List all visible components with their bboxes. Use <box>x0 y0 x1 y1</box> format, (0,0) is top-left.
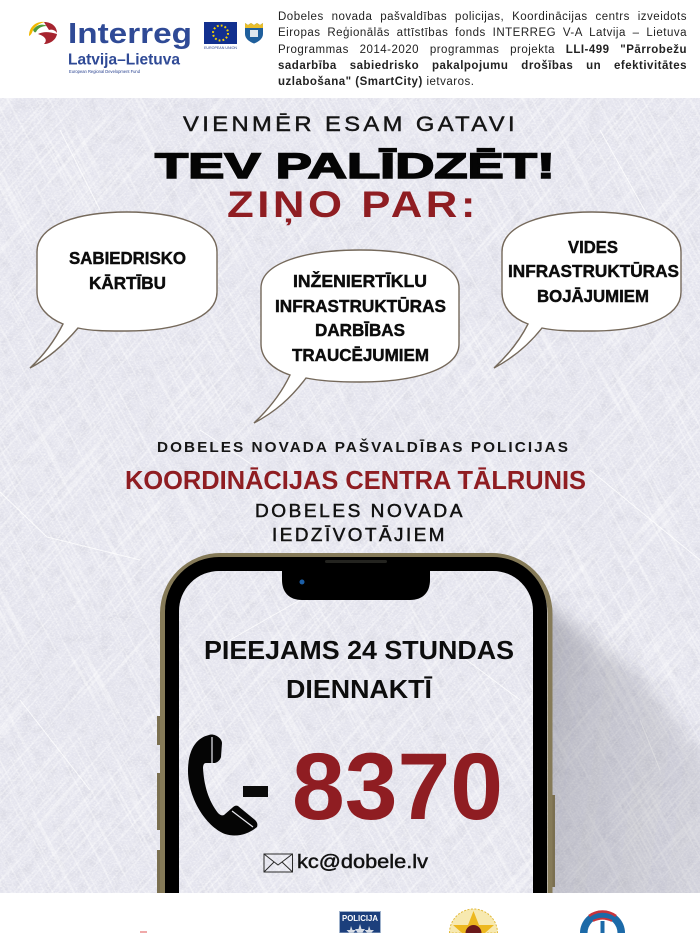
speech bubble: environmental infrastructure damage: VIDES <box>568 237 618 257</box>
speech bubble: utility network disruptions: INFRASTRUKTŪRAS <box>275 296 446 316</box>
icon: telephone handset <box>188 735 257 835</box>
heading: report about: ZIŅO PAR: <box>227 184 479 226</box>
icon: Interreg swirl <box>29 22 57 44</box>
speech bubble: utility network disruptions: INŽENIERTĪKLU <box>293 270 427 291</box>
subheading: for Dobele residents <box>255 501 465 545</box>
project description text: uzlabošana" (SmartCity) ietvaros. <box>278 76 474 88</box>
side buttons <box>157 716 555 893</box>
subheading: for Dobele residents: DOBELES NOVADA <box>255 501 465 521</box>
notch <box>282 568 430 600</box>
logo: police badge <box>340 912 380 933</box>
project description text <box>278 11 687 88</box>
phone drop shadow <box>552 597 700 893</box>
white header band <box>0 0 700 98</box>
speech bubble: utility network disruptions: DARBĪBAS <box>315 320 405 340</box>
speech bubble: environmental infrastructure damage <box>494 212 681 368</box>
logo: partial red mark <box>140 931 147 933</box>
logo: police badge: POLICIJA <box>342 914 378 923</box>
logo: Interreg Latvija-Lietuva: Latvija–Lietuva <box>68 52 180 68</box>
icon: envelope <box>264 854 292 872</box>
main heading: to help you: TEV PALĪDZĒT! <box>155 147 555 186</box>
white footer band <box>0 893 700 933</box>
phone frame <box>157 556 555 893</box>
logo: European Union flag: EUROPEAN UNION <box>204 45 237 50</box>
speech bubble: environmental infrastructure damage: BOJĀJUMIEM <box>537 286 649 306</box>
dash <box>243 786 268 797</box>
speech bubble: public order: KĀRTĪBU <box>89 273 166 293</box>
subheading: coordination centre phone: KOORDINĀCIJAS CENTRA TĀLRUNIS <box>125 465 586 495</box>
logo: European Union flag <box>204 22 237 50</box>
logo: emergency medical service <box>580 910 625 933</box>
subheading: municipal police: DOBELES NOVADA PAŠVALDĪBAS POLICIJAS <box>157 438 570 456</box>
speech bubble: utility network disruptions <box>254 250 459 423</box>
availability text <box>204 635 514 704</box>
availability text: DIENNAKTĪ <box>286 674 433 704</box>
project description text: Programmas 2014-2020 programmas projekta LLI-499 "Pārrobežu <box>278 44 687 56</box>
speech bubble: public order <box>30 212 217 368</box>
project description text: sadarbība sabiedrisko pakalpojumu drošības un efektivitātes <box>278 60 687 72</box>
logo: Interreg Latvija-Lietuva: Interreg <box>68 18 192 50</box>
logo: Dobele crest <box>245 23 263 44</box>
logo: fire and rescue star <box>450 909 498 933</box>
speech bubble: public order: SABIEDRISKO <box>69 248 186 268</box>
logo: Interreg Latvija-Lietuva <box>29 18 192 74</box>
speech bubble: utility network disruptions: TRAUCĒJUMIEM <box>292 345 429 365</box>
phone number: 8370 <box>292 734 503 840</box>
project description text: Dobeles novada pašvaldības policijas, Koordinācijas centrs izveidots <box>278 11 687 23</box>
project description text: Eiropas Reģionālās attīstības fonds INTERREG V-A Latvija – Lietuva <box>278 27 687 39</box>
availability text: PIEEJAMS 24 STUNDAS <box>204 635 514 665</box>
logo: Interreg Latvija-Lietuva: European Regional Development Fund <box>69 69 141 74</box>
main heading: always ready: VIENMĒR ESAM GATAVI <box>183 113 518 136</box>
email address: kc@dobele.lv <box>297 852 429 873</box>
camera <box>300 580 304 584</box>
subheading: for Dobele residents: IEDZĪVOTĀJIEM <box>272 525 447 545</box>
speech bubble: environmental infrastructure damage: INFRASTRUKTŪRAS <box>508 261 679 281</box>
